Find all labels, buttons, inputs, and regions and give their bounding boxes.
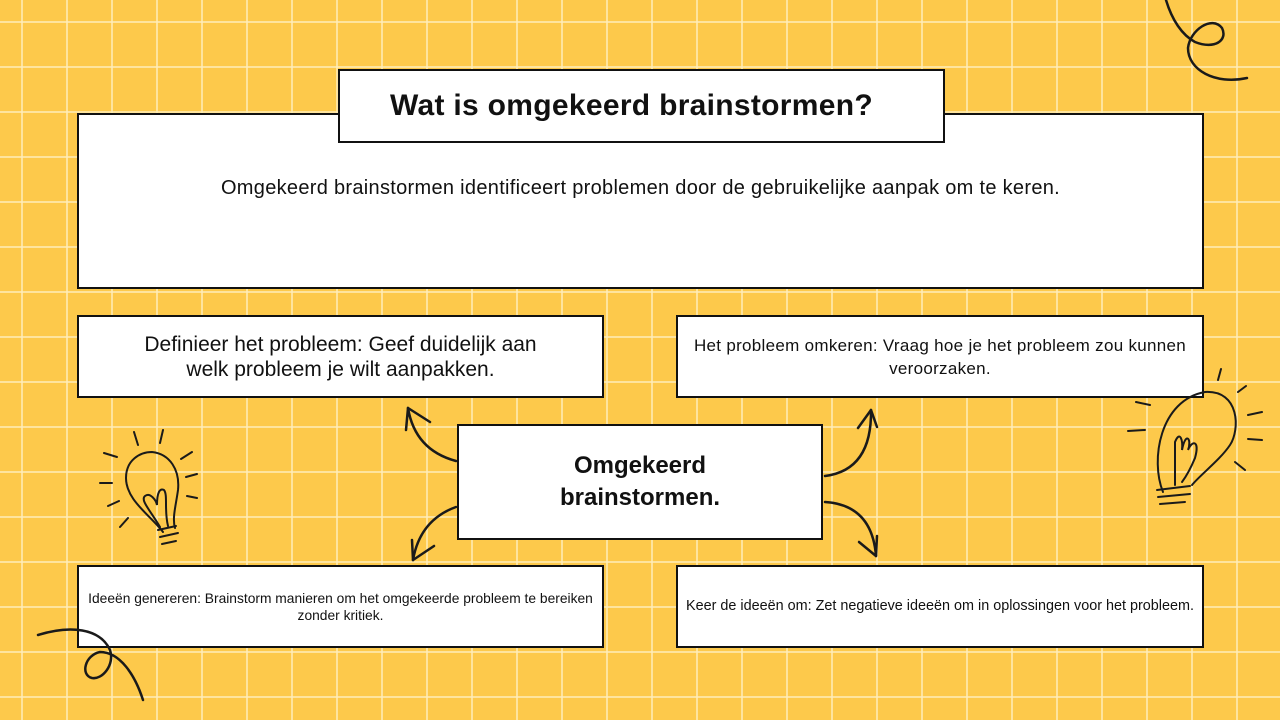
panel: step 4 xyxy=(676,565,1204,648)
arrow: to step 3 xyxy=(412,507,456,560)
panel: step 4: Keer de ideeën om: Zet negatieve ideeën om in oplossingen voor het probleem. xyxy=(686,598,1194,614)
main description panel xyxy=(77,113,1204,289)
panel: step 2 xyxy=(676,315,1204,398)
panel: step 1: Definieer het probleem: Geef duidelijk aan welk probleem je wilt aanpakken. xyxy=(144,332,537,380)
icon: lightbulb left xyxy=(100,430,197,544)
arrow: to step 1 xyxy=(406,408,456,461)
panel: step 3 xyxy=(77,565,604,648)
decoration: swirl top right xyxy=(1166,0,1247,80)
main description panel: Omgekeerd brainstormen identificeert problemen door de gebruikelijke aanpak om te keren. xyxy=(221,177,1060,199)
arrow: to step 2 xyxy=(825,410,877,476)
central node xyxy=(457,424,823,540)
arrow: to step 4 xyxy=(825,502,877,556)
panel: step 3: Ideeën genereren: Brainstorm manieren om het omgekeerde probleem te bereiken zonder kritiek. xyxy=(88,590,593,622)
panel: step 1 xyxy=(77,315,604,398)
decoration: swirl bottom left xyxy=(38,630,143,700)
icon: lightbulb right xyxy=(1128,369,1262,504)
title xyxy=(338,69,945,143)
panel: step 2: Het probleem omkeren: Vraag hoe je het probleem zou kunnen veroorzaken. xyxy=(694,336,1186,378)
title: Wat is omgekeerd brainstormen? xyxy=(390,89,873,122)
central node: Omgekeerd brainstormen. xyxy=(560,452,720,511)
